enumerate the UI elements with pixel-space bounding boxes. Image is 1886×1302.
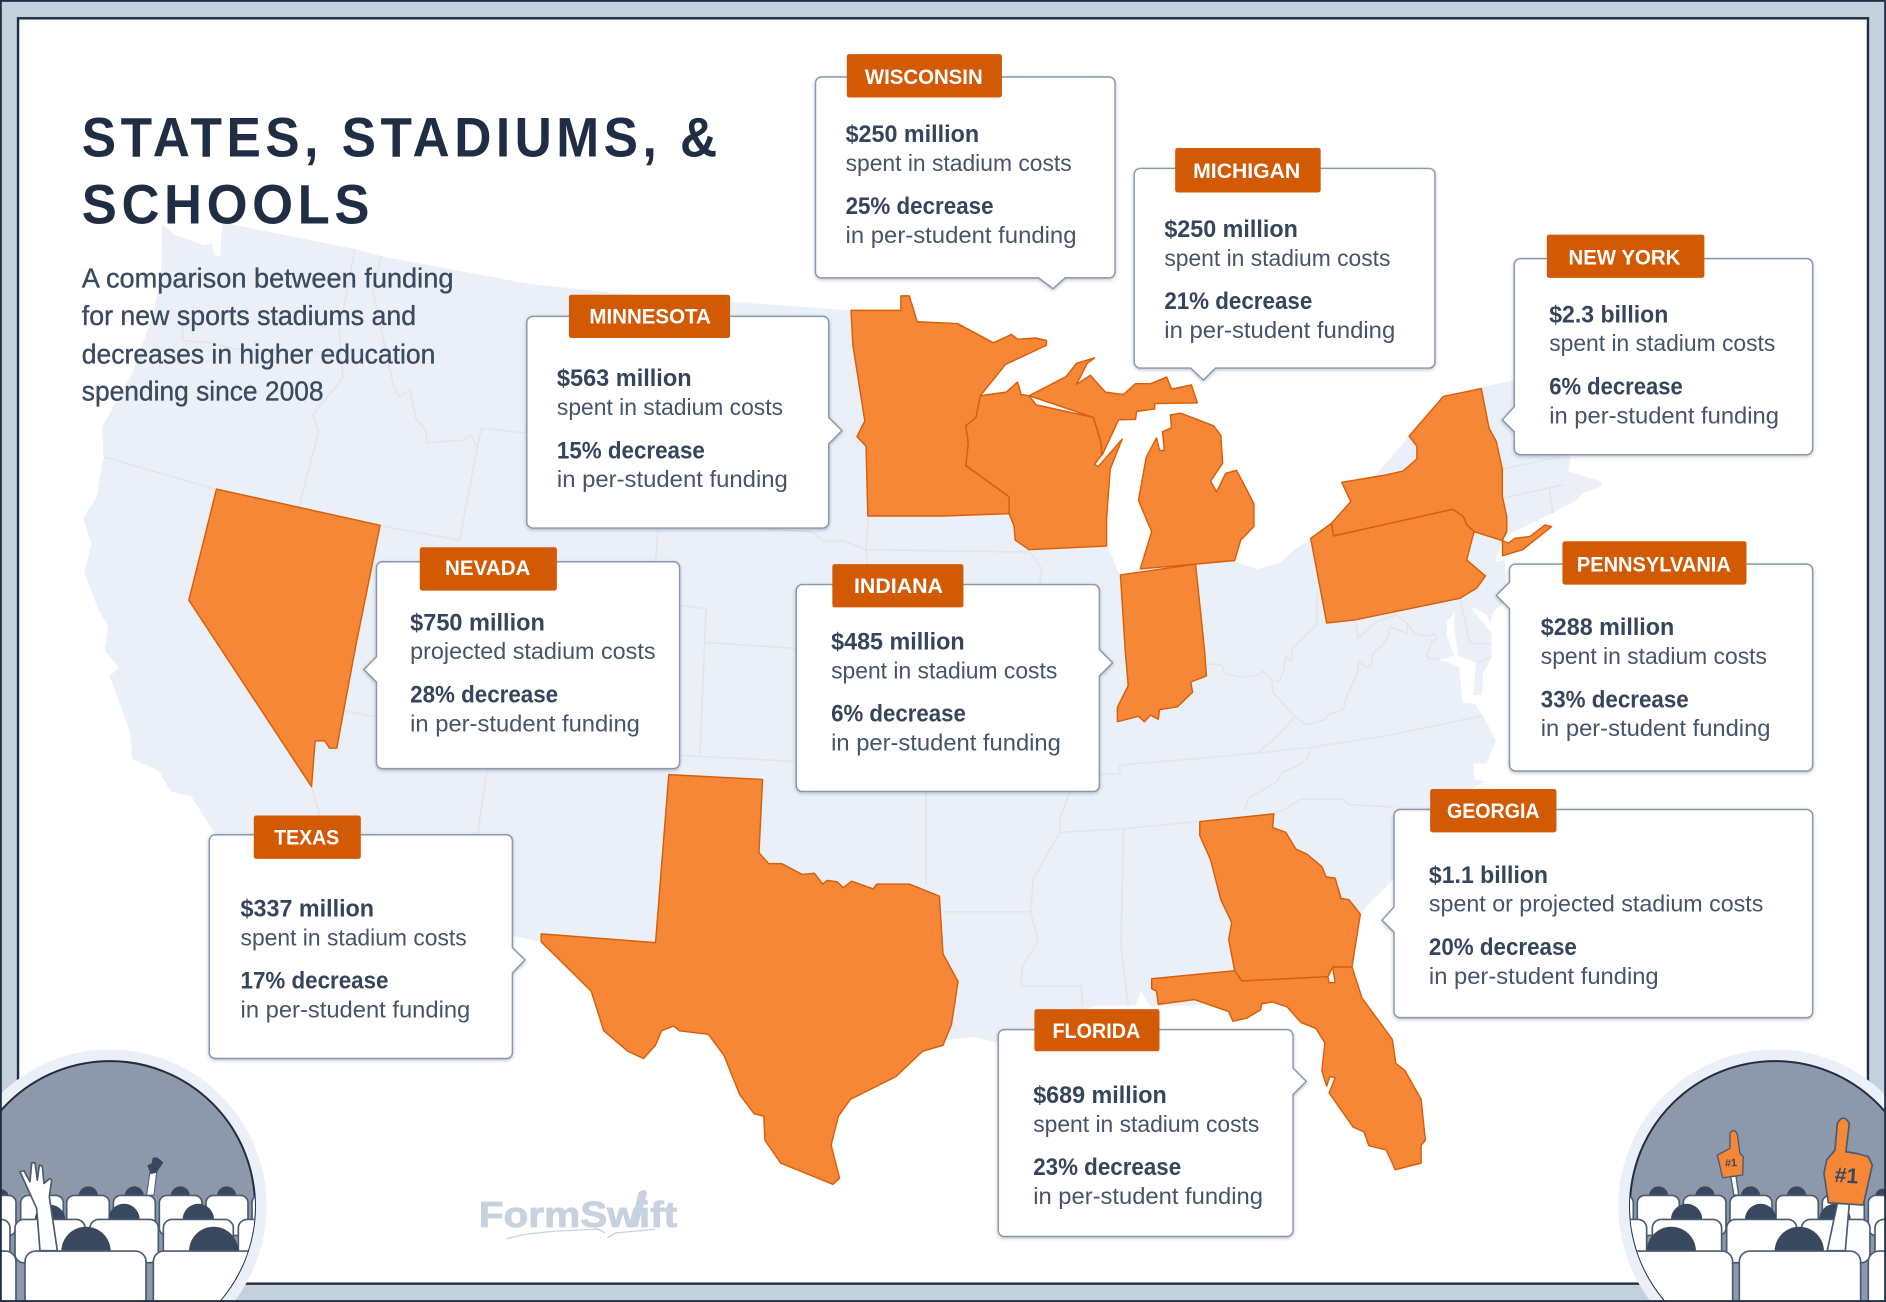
card [1502,259,1813,455]
state tag [420,547,557,591]
callout: Minnesota: spent in stadium costs [557,394,783,420]
callout: Michigan: 21% decrease [1164,288,1312,315]
state tag [254,816,361,859]
state tag [832,564,963,607]
state: Nevada [189,489,380,787]
callout: Nevada: projected stadium costs [410,638,656,664]
callout: Georgia: spent or projected stadium costs [1429,891,1763,917]
state tag [1034,1009,1160,1051]
card [1382,810,1813,1018]
callout: Florida: FLORIDA [1052,1020,1140,1043]
card [1496,564,1813,771]
state: Pennsylvania [1311,509,1485,623]
callout: Minnesota: 15% decrease [557,437,705,464]
callout: Texas [209,816,525,1058]
state: Indiana [1117,564,1206,722]
callout: Texas: $337 million [241,896,374,923]
callout: Minnesota: in per-student funding [557,466,788,492]
subtitle: decreases in higher education [82,338,435,369]
callout: Nevada: $750 million [410,609,545,636]
callout: Indiana: in per-student funding [831,730,1061,756]
state: Michigan [1029,358,1254,569]
callout: Indiana: 6% decrease [831,701,966,728]
callout: Nevada [364,547,680,769]
callout: Indiana: spent in stadium costs [831,657,1057,683]
state: Texas [541,775,958,1184]
callout: Georgia: $1.1 billion [1429,862,1548,889]
callout: Texas: TEXAS [274,826,339,849]
callout: Michigan: $250 million [1164,216,1298,243]
callout: Pennsylvania: in per-student funding [1541,715,1771,741]
callout: New York: $2.3 billion [1549,301,1668,328]
callout: Georgia: GEORGIA [1447,800,1540,823]
callout: Texas: in per-student funding [241,997,470,1023]
card [364,562,680,769]
state: New York [1332,389,1552,556]
callout: Michigan: spent in stadium costs [1164,245,1390,271]
state: Florida [1152,967,1425,1170]
callout: Wisconsin: spent in stadium costs [846,150,1072,176]
base map [83,223,1602,1083]
callout: Georgia: in per-student funding [1429,963,1659,989]
foam finger stick, small [1731,1176,1739,1195]
state tag [569,295,730,338]
callout: Wisconsin: WISCONSIN [865,66,983,89]
callout: Michigan: MICHIGAN [1193,160,1300,183]
state tag [847,54,1002,97]
badge background [1630,1061,1886,1302]
state tag [1430,789,1556,832]
foam finger stick, large [1827,1203,1849,1251]
badge ring [0,1049,267,1302]
title: SCHOOLS [82,174,374,236]
title: STATES, STADIUMS, & [82,106,722,168]
callout: New York: 6% decrease [1549,374,1683,401]
callout: New York: spent in stadium costs [1549,330,1775,356]
callout: Wisconsin: 25% decrease [846,193,994,220]
callout: Michigan: in per-student funding [1164,317,1395,343]
foam finger, large [1824,1118,1872,1205]
state: Georgia [1200,814,1360,981]
callout: Pennsylvania [1496,541,1813,771]
lower peninsula [1138,413,1254,569]
callout: Florida: spent in stadium costs [1033,1111,1259,1137]
callout: Florida: $689 million [1033,1082,1167,1109]
highlighted states [189,296,1552,1184]
raised arm [20,1163,57,1251]
callout: New York [1502,235,1813,455]
callout: Pennsylvania: 33% decrease [1541,686,1689,713]
map of the United States [83,223,1602,1184]
state tag [1175,148,1321,192]
callout: Nevada: NEVADA [445,557,530,580]
callout: Minnesota: $563 million [557,365,692,392]
callout: New York: NEW YORK [1568,247,1680,270]
badge background [0,1061,255,1302]
FormSwift logo: FormSwift [479,1194,677,1235]
callout: Wisconsin [816,54,1115,289]
callout: Minnesota [527,295,842,528]
subtitle: spending since 2008 [82,376,324,407]
card [209,835,525,1058]
state borders [105,249,1563,1006]
foam finger, small [1717,1131,1743,1178]
title [82,106,722,236]
callout: Indiana: INDIANA [854,575,943,598]
subtitle: A comparison between funding [82,262,453,293]
card [816,77,1115,289]
callout: Georgia: 20% decrease [1429,934,1577,961]
badge ring [1618,1049,1886,1302]
callout: Nevada: in per-student funding [410,710,640,736]
illustration: stadium crowd with raised hands [2,1050,266,1300]
callout: Texas: spent in stadium costs [241,924,467,950]
callout: Indiana: $485 million [831,629,965,656]
callout: Georgia [1382,789,1813,1018]
foam finger, large: #1 [1834,1163,1859,1189]
illustration: stadium crowd with foam fingers [1618,1050,1884,1300]
card [527,316,842,528]
subtitle: for new sports stadiums and [82,300,416,331]
state tag [1547,235,1704,278]
foam finger, small: #1 [1725,1157,1737,1170]
card [1134,168,1435,380]
state: Wisconsin [966,382,1122,550]
card [998,1030,1306,1237]
callout: Texas: 17% decrease [241,968,389,995]
subtitle [82,262,453,407]
upper peninsula [1029,358,1197,455]
callout: Florida [998,1009,1306,1237]
callout: New York: in per-student funding [1549,402,1779,428]
callout: Florida: in per-student funding [1033,1183,1263,1209]
state: Minnesota [851,296,1046,516]
callout: Minnesota: MINNESOTA [589,306,711,329]
callout: Wisconsin: in per-student funding [846,222,1077,248]
state tag [1562,541,1746,585]
card [796,585,1113,791]
callout: Pennsylvania: PENNSYLVANIA [1577,553,1731,576]
callout: Florida: 23% decrease [1033,1154,1181,1181]
callout: Pennsylvania: $288 million [1541,614,1674,641]
callout: Indiana [796,564,1113,791]
callout: Nevada: 28% decrease [410,681,558,708]
callout: Michigan [1134,148,1435,380]
callout: Wisconsin: $250 million [846,121,979,148]
callout: Pennsylvania: spent in stadium costs [1541,643,1767,669]
distant raised arm [147,1172,157,1195]
